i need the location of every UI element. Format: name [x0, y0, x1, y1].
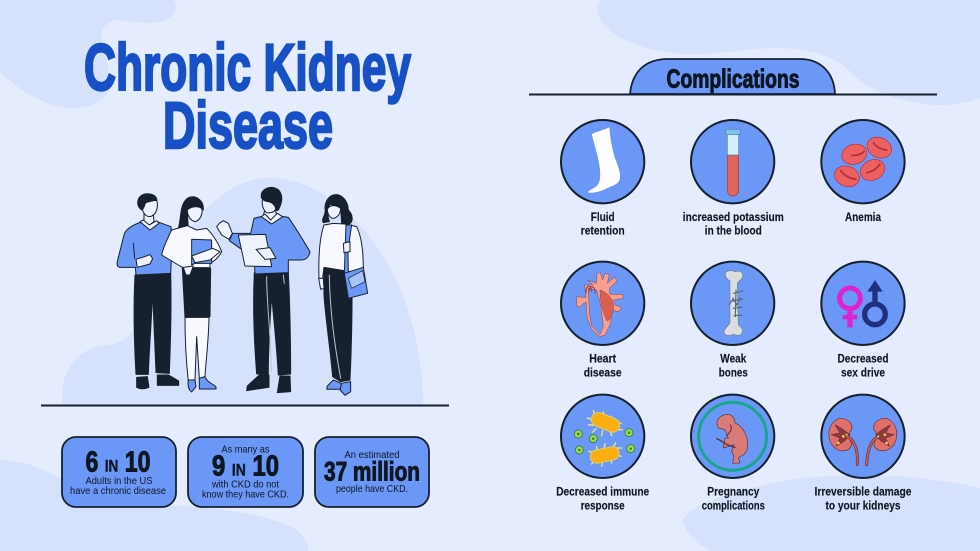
- item: pregnancy complications: complications: [702, 498, 765, 512]
- stat card: 9 in 10: know they have CKD.: [202, 488, 289, 500]
- item: weak bones: [691, 262, 774, 379]
- stat card: 6 in 10: have a chronic disease: [70, 485, 166, 497]
- icon: bacteria and cells: [561, 395, 644, 478]
- item: decreased sex drive: Decreased: [838, 352, 888, 366]
- item: decreased sex drive: sex drive: [841, 365, 885, 379]
- stat card: 9 in 10: with CKD do not: [211, 478, 279, 490]
- person: woman with folder: [162, 197, 222, 392]
- item: anemia: Anemia: [845, 210, 881, 224]
- icon: blood test tube: [691, 120, 774, 203]
- stat card: 37 million: 37 million: [324, 456, 420, 486]
- stat card: 37 million: people have CKD.: [336, 483, 408, 495]
- item: heart disease: [561, 262, 644, 379]
- item: increased potassium: in the blood: [705, 224, 762, 238]
- item: heart disease: Heart: [589, 352, 616, 366]
- item: increased potassium: increased potassium: [683, 210, 784, 224]
- item: pregnancy complications: [691, 395, 774, 512]
- item: irreversible damage: to your kidneys: [826, 498, 901, 512]
- item: fluid retention: Fluid: [591, 210, 615, 224]
- item: decreased sex drive: [821, 262, 905, 379]
- person: man with clipboard: [217, 187, 310, 393]
- stat card: 9 in 10: As many as: [222, 444, 270, 456]
- item: increased potassium: [683, 120, 784, 238]
- item: pregnancy complications: Pregnancy: [707, 485, 760, 499]
- person: woman with shoulder bag: [319, 195, 368, 395]
- item: fluid retention: [561, 120, 644, 238]
- item: anemia: [821, 120, 905, 224]
- stat card: 9 in 10: [188, 437, 303, 507]
- stat card: 6 in 10: 6 IN 10: [86, 446, 150, 478]
- baseline rule: left panel: [41, 404, 449, 406]
- person: man with blue sweater, left: [117, 194, 179, 389]
- item: irreversible damage: Irreversible damage: [814, 485, 912, 499]
- icon: fractured bone: [691, 262, 774, 345]
- heading: Complications tab: [529, 59, 937, 96]
- item: fluid retention: retention: [581, 224, 625, 238]
- heading: Complications tab: Complications: [666, 64, 800, 94]
- item: decreased immune response: response: [581, 498, 625, 512]
- stat card: 37 million: [315, 437, 429, 507]
- stat card: 6 in 10: Adults in the US: [86, 475, 152, 487]
- icon: leg in white sock: [561, 120, 644, 203]
- title: [84, 30, 411, 162]
- title: Chronic Kidney: [84, 30, 411, 104]
- icon: red blood cells: [821, 120, 905, 203]
- item: weak bones: bones: [719, 365, 748, 379]
- item: decreased immune response: Decreased immune: [556, 485, 649, 499]
- illustration: four people talking: [62, 178, 423, 405]
- item: heart disease: disease: [584, 365, 622, 379]
- item: weak bones: Weak: [720, 352, 747, 366]
- icon: heart cross-section: [561, 262, 644, 345]
- item: decreased immune response: [556, 395, 649, 512]
- item: irreversible damage: [814, 395, 912, 512]
- title: Disease: [163, 88, 333, 162]
- icon: fetus in womb: [691, 395, 774, 478]
- icon: female and male symbols: [821, 262, 905, 345]
- stat card: 6 in 10: [62, 437, 176, 507]
- stat card: 9 in 10: 9 IN 10: [212, 451, 279, 483]
- icon: pair of kidneys: [821, 395, 905, 478]
- stat card: 37 million: An estimated: [344, 449, 400, 461]
